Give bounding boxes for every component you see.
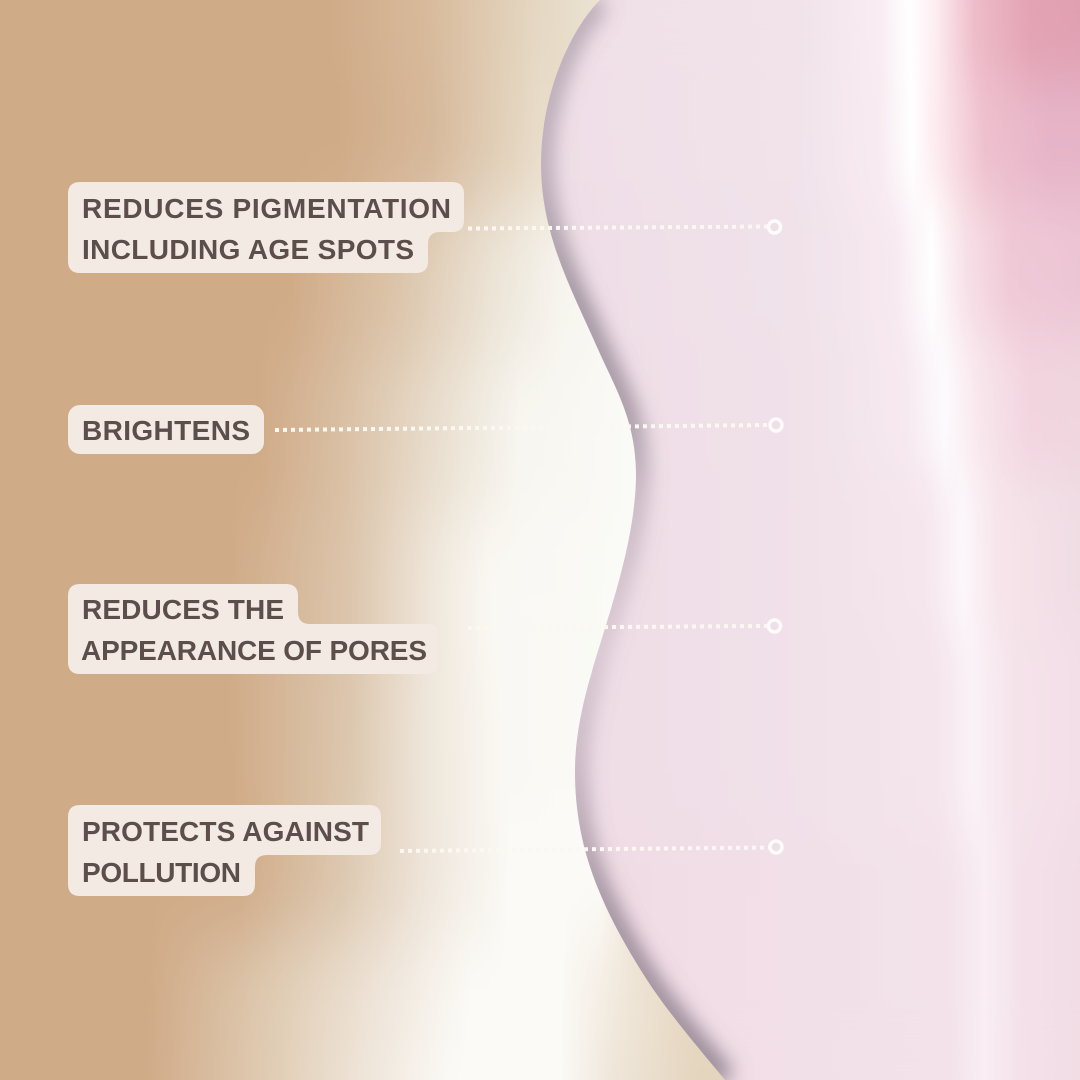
label: reduces the appearance of pores: REDUCES THE	[82, 594, 284, 625]
panel: pink serum swatch with curved edge	[520, 0, 1080, 1080]
label: protects against pollution: PROTECTS AGAINST	[82, 816, 369, 847]
label: brightens: BRIGHTENS	[82, 415, 250, 446]
connector lines and markers	[275, 221, 782, 853]
connector 3	[468, 620, 780, 632]
connector 4	[400, 841, 782, 853]
connector 1	[468, 221, 780, 233]
label: protects against pollution	[68, 805, 381, 896]
label: reduces the appearance of pores	[68, 584, 439, 674]
label: brightens	[68, 405, 264, 454]
label: reduces pigmentation: REDUCES PIGMENTATION	[82, 193, 451, 224]
connector 2	[275, 419, 782, 431]
label: reduces pigmentation	[68, 182, 464, 273]
label: protects against pollution: POLLUTION	[82, 857, 241, 888]
label: reduces pigmentation: INCLUDING AGE SPOTS	[82, 234, 414, 265]
label: reduces the appearance of pores: APPEARANCE OF PORES	[81, 635, 427, 666]
